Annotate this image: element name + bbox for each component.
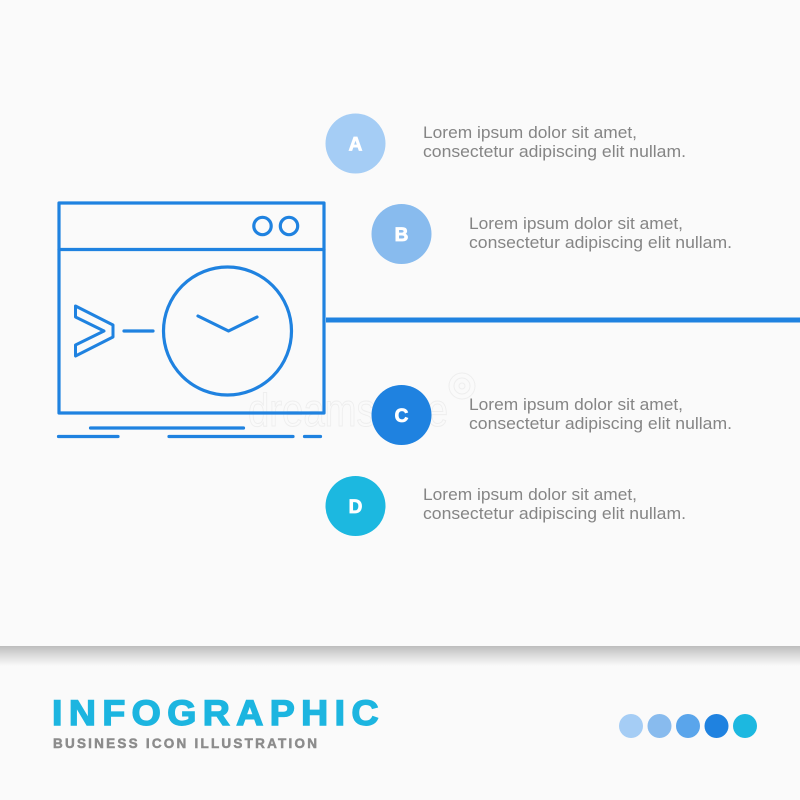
window frame (59, 203, 324, 413)
text D: Lorem ipsum dolor sit amet, (423, 485, 637, 504)
text B: consectetur adipiscing elit nullam. (469, 233, 732, 252)
badge D: D (349, 497, 362, 518)
palette dots (619, 714, 757, 738)
window title bar divider (59, 248, 324, 251)
badge D (326, 476, 386, 536)
window buttons (254, 217, 298, 235)
footer shadow band (0, 646, 800, 666)
badge A: A (349, 134, 363, 156)
item A (326, 114, 686, 174)
clock face (164, 267, 292, 395)
text C: consectetur adipiscing elit nullam. (469, 414, 732, 433)
badge C (372, 385, 432, 445)
badge C: C (395, 406, 409, 427)
connector line (326, 318, 800, 322)
item C (372, 385, 732, 445)
text B: Lorem ipsum dolor sit amet, (469, 214, 683, 233)
badge A (326, 114, 386, 174)
subtitle: BUSINESS ICON ILLUSTRATION (53, 736, 317, 751)
text C: Lorem ipsum dolor sit amet, (469, 395, 683, 414)
text A: consectetur adipiscing elit nullam. (423, 142, 686, 161)
badge B: B (395, 225, 408, 246)
ground lines (58, 428, 320, 436)
prompt dash (124, 329, 153, 333)
watermark: dreamstime (248, 384, 448, 436)
title: INFOGRAPHIC (52, 694, 385, 733)
badge B (372, 204, 432, 264)
text D: consectetur adipiscing elit nullam. (423, 504, 686, 523)
item D (326, 476, 686, 536)
item B (372, 204, 732, 264)
clock hands (198, 316, 257, 331)
text A: Lorem ipsum dolor sit amet, (423, 123, 637, 142)
icon: terminal window with clock (58, 203, 324, 436)
command prompt chevron (76, 306, 113, 356)
